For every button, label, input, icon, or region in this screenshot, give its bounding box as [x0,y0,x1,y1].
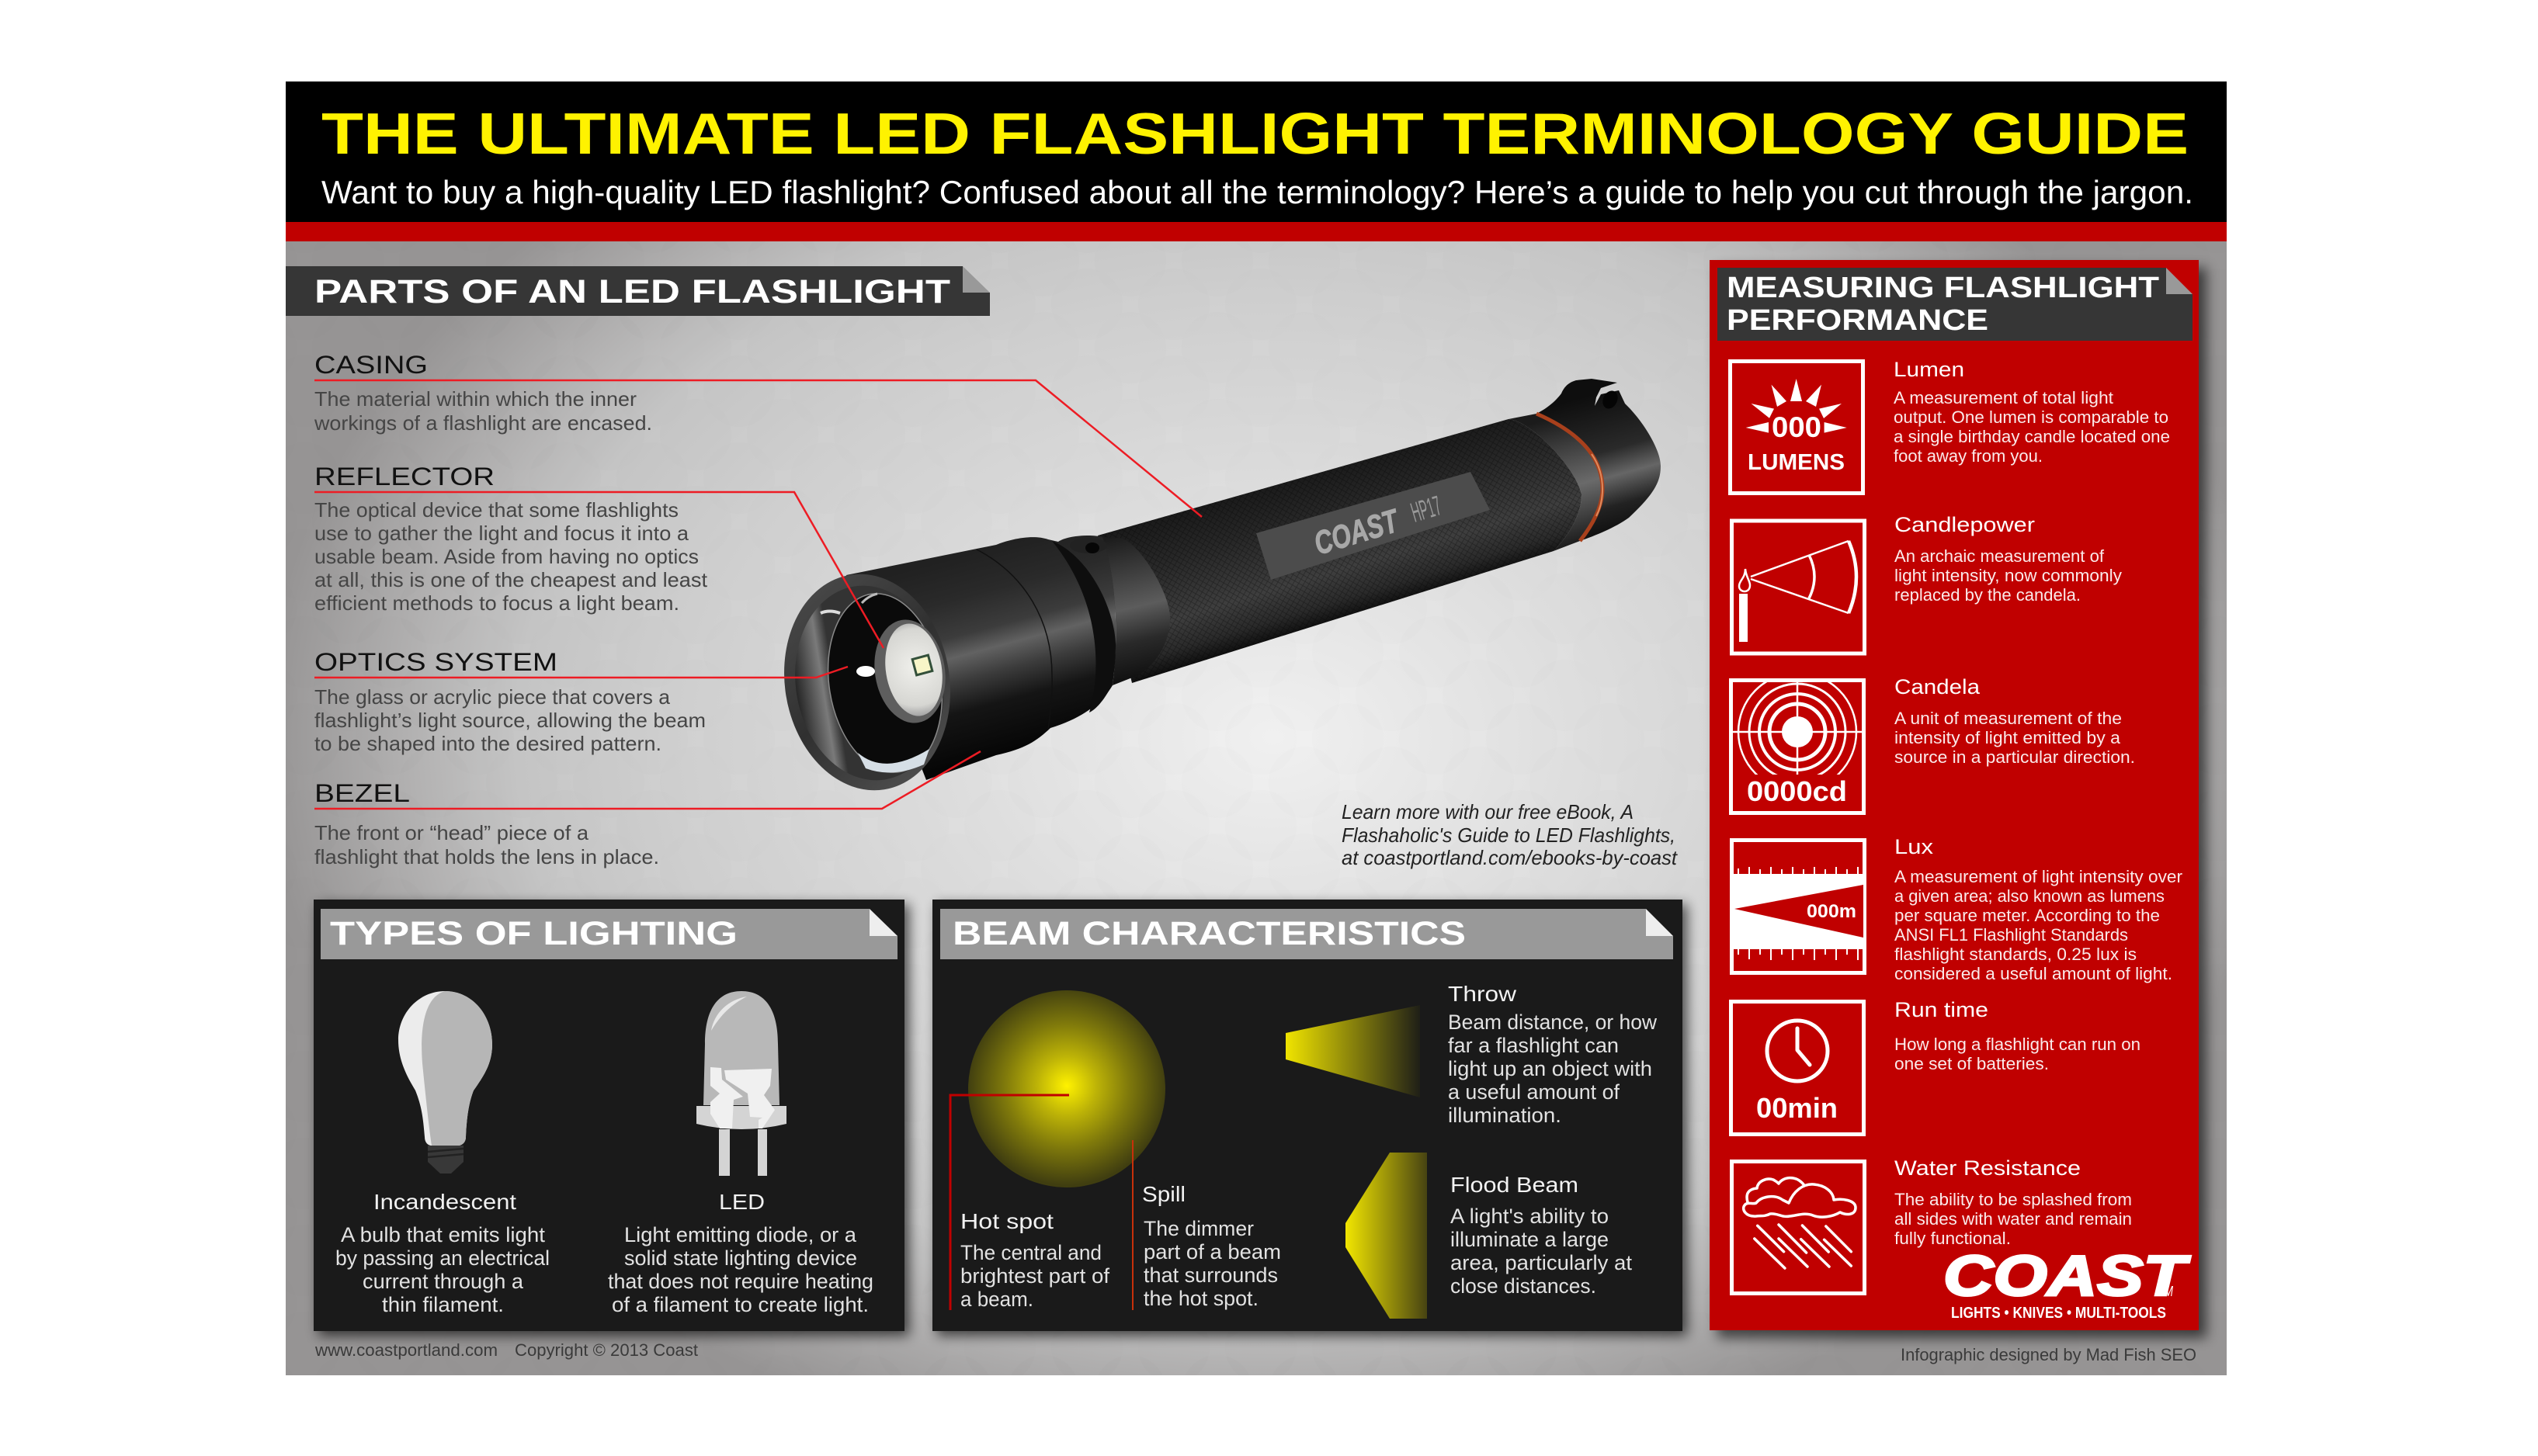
reflector [867,615,953,728]
icon: lumens: LUMENS [1748,450,1845,475]
text: lumen [1894,358,2170,466]
text: candlepower: light intensity, now commonly [1894,566,2122,585]
glass lens [781,575,958,791]
part: bezel: flashlight that holds the lens in place. [314,845,659,868]
icon: flood beam [1345,1153,1427,1319]
text: lux: a given area; also known as lumens [1894,886,2165,906]
icon: lumens: 000 [1772,411,1821,443]
end cap with lanyard tab [1536,379,1661,541]
callout line: hot spot [950,1095,1069,1310]
text: incandescent: by passing an electrical [335,1246,550,1270]
text: hot spot: a beam. [960,1288,1033,1311]
head and neck body [846,536,1116,780]
text: lux: A measurement of light intensity over [1894,867,2182,886]
heading: parts of an LED flashlight: PARTS OF AN LED FLASHLIGHT [314,273,950,310]
footer: website and copyright [314,1340,698,1360]
footer: website and copyright: Copyright © 2013 Coast [515,1340,698,1360]
lens glints [856,666,875,677]
text: incandescent: current through a [363,1270,524,1293]
text: flood beam: area, particularly at [1450,1251,1633,1274]
text: run time: one set of batteries. [1894,1054,2049,1073]
tube [1098,419,1581,683]
text: LED: LED [719,1190,765,1214]
text: incandescent: A bulb that emits light [341,1223,545,1246]
text: candela: source in a particular direction. [1894,747,2135,767]
panel: beam characteristics [932,900,1687,1336]
text: throw: Beam distance, or how [1448,1011,1657,1034]
text: lumen: a single birthday candle located one [1894,427,2170,446]
flashlight photo illustration: HP17 [1408,490,1445,529]
text: candlepower: An archaic measurement of [1894,546,2105,566]
text: spill: part of a beam [1144,1240,1281,1264]
collar ring [1102,537,1170,685]
text: LED: Light emitting diode, or a [624,1223,857,1246]
text: flood beam: close distances. [1450,1274,1596,1298]
part: optics system [314,648,848,755]
icon: candela [1731,673,1863,813]
text: throw: Throw [1448,982,1517,1006]
part: optics system: flashlight’s light source, allowing the beam [314,709,706,732]
part: reflector: usable beam. Aside from having no optics [314,545,699,568]
flashlight photo illustration [769,379,1661,803]
neck groove [1052,541,1116,712]
text: lumen: foot away from you. [1894,446,2043,466]
part: optics system: OPTICS SYSTEM [314,648,557,676]
infographic [286,81,2227,1375]
panel: types of lighting [314,900,909,1336]
text: lux: considered a useful amount of light. [1894,964,2172,983]
part: bezel: BEZEL [314,779,410,807]
heading: beam characteristics [940,909,1673,959]
logo: Coast: COAST [1943,1245,2191,1308]
icon: candela: 0000cd [1747,775,1847,807]
text: hot spot [960,1209,1110,1311]
text: hot spot: brightest part of [960,1264,1110,1288]
text: candela [1894,675,2135,767]
heading: parts of an LED flashlight [286,266,990,316]
icon: water resistance [1731,1161,1865,1293]
subtitle: Want to buy a high-quality LED flashlight? Confused about all the terminology? Here’s a guide to help you cut through the jargon. [321,174,2193,210]
orange ring [1536,414,1602,541]
knob [1070,538,1107,553]
part: casing: workings of a flashlight are encased. [314,411,652,435]
text: spill: The dimmer [1144,1217,1254,1240]
text: hot spot: The central and [960,1241,1102,1264]
text: throw: illumination. [1448,1104,1561,1127]
page background [286,241,2227,1375]
heading: beam characteristics: BEAM CHARACTERISTICS [953,915,1466,952]
text: throw: far a flashlight can [1448,1034,1619,1057]
part: bezel [314,751,981,868]
logo: Coast: LIGHTS • KNIVES • MULTI-TOOLS [1951,1305,2166,1322]
part: bezel: The front or “head” piece of a [314,821,589,844]
text: LED: that does not require heating [608,1270,873,1293]
icon: run time clock: 00min [1756,1092,1838,1124]
text: water resistance: The ability to be splashed from [1894,1190,2132,1209]
ebook note [1342,800,1679,869]
part: casing: CASING [314,351,428,379]
heading: measuring flashlight performance [1717,268,2193,341]
text: candela: A unit of measurement of the [1894,709,2122,728]
text: run time: Run time [1894,998,1988,1021]
text: throw: light up an object with [1448,1057,1652,1080]
text: lux: flashlight standards, 0.25 lux is [1894,945,2137,964]
tail band [1509,414,1602,551]
text: candela: intensity of light emitted by a [1894,728,2121,747]
header band [286,81,2227,241]
footer: website and copyright: www.coastportland.com [314,1340,498,1360]
text: lumen: Lumen [1894,358,1964,381]
part: casing [314,351,1202,517]
text: hot spot: Hot spot [960,1209,1054,1233]
plate logo: COAST [1310,501,1404,562]
part: casing: The material within which the inner [314,387,637,411]
part: reflector: at all, this is one of the cheapest and least [314,568,708,591]
text: flood beam: Flood Beam [1450,1173,1578,1197]
icon: incandescent bulb [398,991,492,1173]
part: reflector: efficient methods to focus a light beam. [314,591,679,615]
text: lux: Lux [1894,835,1934,858]
text: candlepower: Candlepower [1894,513,2035,536]
part: optics system: to be shaped into the desired pattern. [314,732,661,755]
title: THE ULTIMATE LED FLASHLIGHT TERMINOLOGY GUIDE [321,101,2189,166]
icon: candlepower [1731,521,1865,653]
part: reflector: use to gather the light and focus it into a [314,522,689,545]
text: throw: a useful amount of [1448,1080,1620,1104]
text: LED: solid state lighting device [624,1246,857,1270]
text: flood beam [1450,1173,1633,1298]
text: spill: that surrounds [1144,1264,1278,1287]
icon: LED [696,991,786,1176]
logo: Coast: TM [2158,1284,2173,1299]
icon: run time clock [1731,1001,1863,1135]
text: LED [608,1190,873,1316]
icon: throw beam [1286,1005,1420,1097]
icon: lumens [1730,362,1863,494]
text: incandescent [335,1190,550,1316]
text: water resistance [1894,1156,2132,1248]
lanyard hole [1600,388,1620,411]
heading: types of lighting [321,909,898,959]
text: spill: the hot spot. [1144,1287,1259,1310]
text: run time [1894,998,2140,1073]
LED chip [911,653,934,677]
text: lumen: output. One lumen is comparable to [1894,407,2168,427]
ebook note: Flashaholic's Guide to LED Flashlights, [1342,823,1675,847]
callout line: spill [1132,1140,1134,1310]
text: candela: Candela [1894,675,1981,699]
text: water resistance: fully functional. [1894,1229,2011,1248]
text: incandescent: Incandescent [373,1190,516,1214]
heading: types of lighting: TYPES OF LIGHTING [330,915,738,952]
part: optics system: The glass or acrylic piece that covers a [314,685,671,709]
panel: measuring flashlight performance [1710,260,2206,1338]
part: reflector: REFLECTOR [314,463,495,491]
text: run time: How long a flashlight can run on [1894,1035,2140,1054]
text: spill: Spill [1142,1182,1186,1206]
text: flood beam: A light's ability to [1450,1205,1609,1228]
text: water resistance: Water Resistance [1894,1156,2081,1180]
text: lux: per square meter. According to the [1894,906,2160,925]
icon: lux [1731,840,1865,973]
heading: measuring flashlight performance: PERFORMANCE [1727,304,1988,337]
text: candlepower [1894,513,2122,605]
ebook note: Learn more with our free eBook, A [1342,800,1634,823]
text: LED: of a filament to create light. [612,1293,869,1316]
heading: measuring flashlight performance: MEASURING FLASHLIGHT [1727,272,2159,304]
icon: lux: 000m [1807,901,1856,922]
ebook note: at coastportland.com/ebooks-by-coast [1342,846,1679,869]
text: incandescent: thin filament. [382,1293,504,1316]
text: lux: ANSI FL1 Flashlight Standards [1894,925,2128,945]
part: reflector [314,463,884,648]
bezel rim [769,562,966,803]
text: throw [1448,982,1657,1127]
part: reflector: The optical device that some flashlights [314,498,679,522]
text: spill [1142,1182,1281,1310]
text: lux [1894,835,2182,983]
logo: Coast [1943,1245,2191,1322]
text: flood beam: illuminate a large [1450,1228,1609,1251]
name plate [1256,472,1490,580]
footer: designer credit: Infographic designed by Mad Fish SEO [1901,1345,2196,1364]
text: water resistance: all sides with water and remain [1894,1209,2132,1229]
text: candlepower: replaced by the candela. [1894,585,2081,605]
text: lumen: A measurement of total light [1894,388,2113,407]
icon: beam spot [968,990,1165,1187]
head seam [977,549,1052,730]
